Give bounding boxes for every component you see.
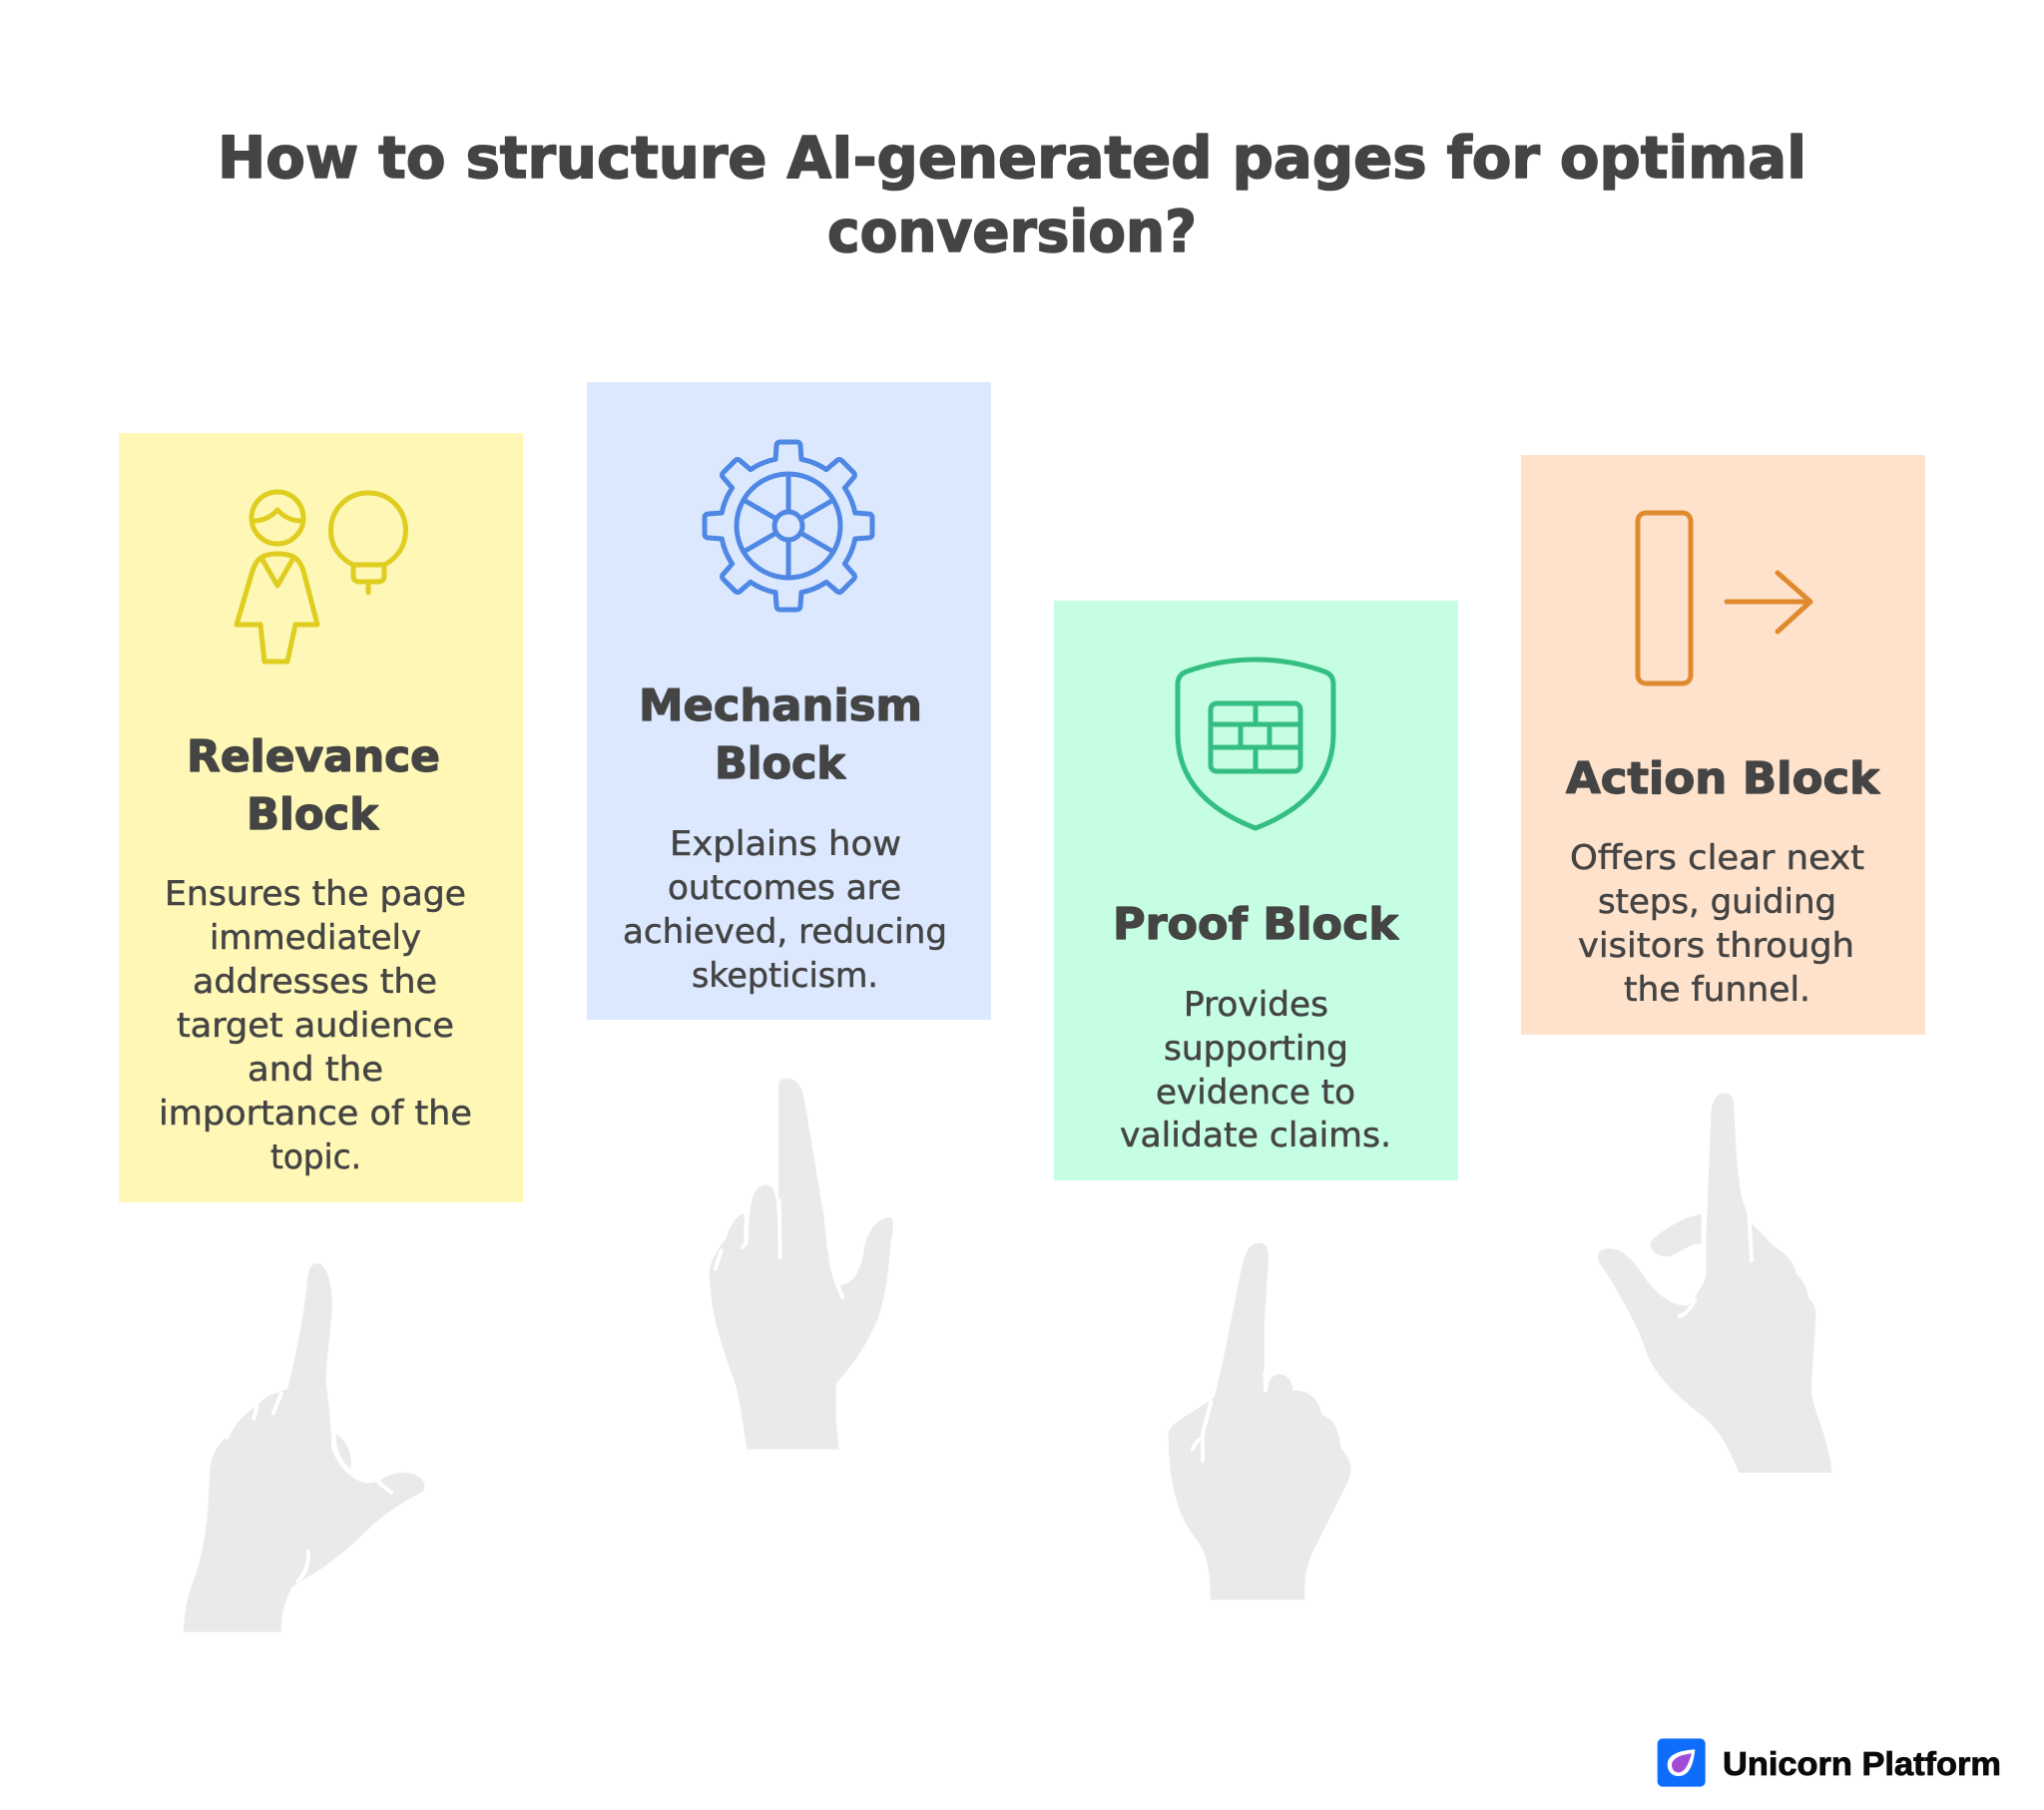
text: action description: Offers clear next xyxy=(1570,838,1864,878)
icon: person with light bulb xyxy=(237,492,405,662)
text: relevance description: immediately xyxy=(210,918,421,958)
heading: relevance block: Relevance xyxy=(187,731,440,782)
icon: door and arrow xyxy=(1638,513,1810,683)
panel background: proof xyxy=(1054,601,1458,1180)
panel background: mechanism xyxy=(587,382,991,1020)
panel: proof block xyxy=(1054,601,1458,1180)
text: relevance description: and the xyxy=(248,1050,383,1090)
text: action description xyxy=(1570,838,1864,1010)
text: proof description: evidence to xyxy=(1156,1073,1355,1113)
text: mechanism description xyxy=(623,824,947,996)
title: How to structure AI-generated pages for optimal xyxy=(218,124,1806,192)
text: relevance description: target audience xyxy=(177,1006,454,1046)
heading: proof block: Proof Block xyxy=(1113,899,1400,950)
heading: mechanism block: Mechanism xyxy=(639,680,922,731)
text: proof description: validate claims. xyxy=(1120,1116,1391,1155)
panel: action block xyxy=(1521,455,1925,1035)
text: mechanism description: outcomes are xyxy=(668,868,901,908)
title xyxy=(218,124,1806,265)
hand: pointing up under relevance block xyxy=(184,1263,424,1632)
text: brand name: Unicorn Platform xyxy=(1723,1745,2001,1782)
text: action description: the funnel. xyxy=(1624,970,1810,1010)
heading: mechanism block xyxy=(639,680,922,789)
title: conversion? xyxy=(827,198,1197,265)
text: action description: visitors through xyxy=(1578,926,1854,966)
heading: relevance block xyxy=(187,731,440,840)
text: mechanism description: skepticism. xyxy=(692,956,878,996)
heading: action block: Action Block xyxy=(1566,753,1881,804)
text: proof description: Provides xyxy=(1184,985,1328,1025)
icon: shield with brick wall xyxy=(1178,660,1333,828)
heading: relevance block: Block xyxy=(247,789,380,840)
panel: mechanism block xyxy=(587,382,991,1020)
icon: logo mark xyxy=(1658,1738,1706,1787)
text: action description: steps, guiding xyxy=(1598,882,1836,922)
panel: relevance block xyxy=(119,433,523,1202)
text: relevance description: topic. xyxy=(270,1137,361,1177)
text: relevance description: Ensures the page xyxy=(165,874,466,914)
panel background: action xyxy=(1521,455,1925,1035)
hand: pointing up under mechanism block xyxy=(710,1079,893,1450)
icon: gear wheel xyxy=(705,442,872,610)
hand: pointing up under proof block xyxy=(1169,1243,1351,1599)
logo: Unicorn Platform xyxy=(1658,1738,2001,1787)
text: relevance description: addresses the xyxy=(193,962,437,1002)
text: relevance description xyxy=(159,874,472,1177)
text: mechanism description: achieved, reducing xyxy=(623,912,947,952)
text: mechanism description: Explains how xyxy=(670,824,901,864)
panel background: relevance xyxy=(119,433,523,1202)
hand: pointing up under action block xyxy=(1598,1094,1832,1473)
heading: mechanism block: Block xyxy=(715,738,847,789)
text: relevance description: importance of the xyxy=(159,1094,472,1133)
text: proof description xyxy=(1120,985,1391,1155)
text: proof description: supporting xyxy=(1164,1029,1348,1069)
